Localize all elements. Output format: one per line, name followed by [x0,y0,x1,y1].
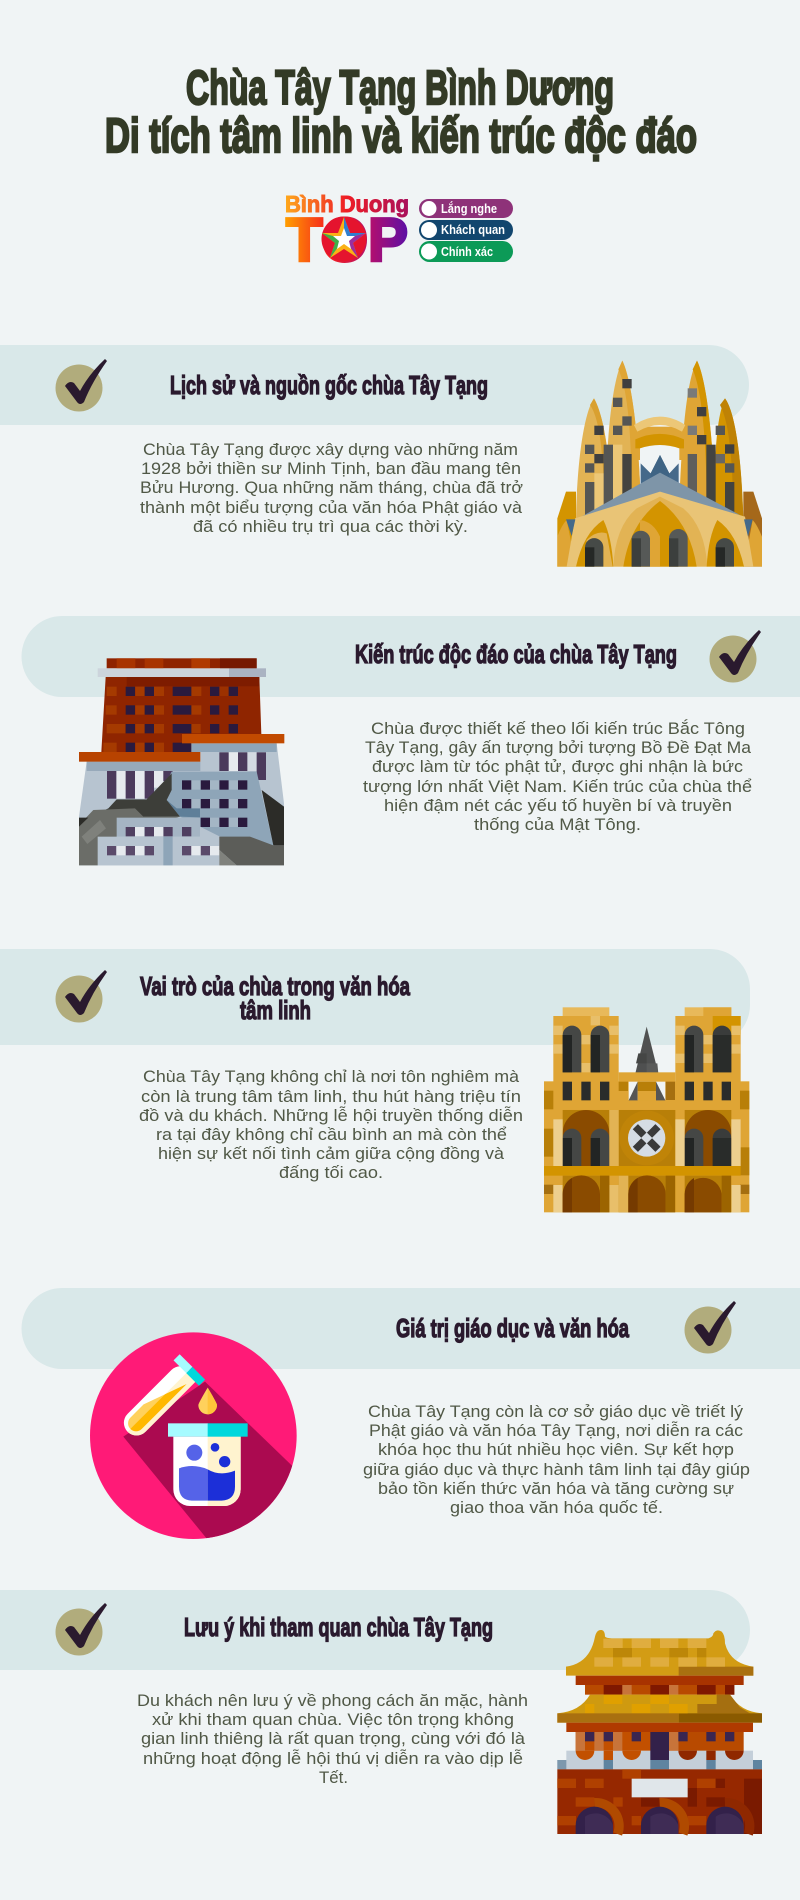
logo: Bình Dương TOP: Chính xác [441,244,493,259]
illustration: red and grey palace [79,658,284,865]
text block: xử khi tham quan chùa. Việc tôn trọng không [152,1710,514,1729]
text block: Chùa Tây Tạng không chỉ là nơi tôn nghiêm mà [143,1067,520,1086]
text block: gian linh thiêng là rất quan trọng, cùng với đó là [141,1729,526,1748]
panel: cultural role [0,949,750,1212]
panel: education [22,1288,800,1547]
text block: Tây Tạng, gây ấn tượng bởi tượng Bồ Đề Đạt Ma [365,738,752,757]
text block: thành một biểu tượng của văn hóa Phật giáo và [140,498,523,517]
text block: bảo tồn kiến thức văn hóa và tăng cường sự [378,1479,734,1498]
icon: check mark [56,1603,107,1656]
text block [140,440,523,536]
text block [363,1402,750,1517]
heading band [0,949,750,1045]
text block [139,1067,523,1182]
logo: Bình Dương TOP: Khách quan [441,222,505,237]
panel: architecture [22,616,800,865]
text block: thống của Mật Tông. [474,815,641,834]
logo: Bình Dương TOP: TOP [286,206,408,274]
text block [363,719,752,834]
illustration: imperial gate pagoda [557,1630,762,1834]
text block: 1928 bởi thiền sư Minh Tịnh, ban đầu mang tên [141,459,521,478]
text block: Chùa Tây Tạng được xây dựng vào những năm [143,440,518,459]
text block: Phật giáo và văn hóa Tây Tạng, nơi diễn ra các [369,1421,744,1440]
text block: đã có nhiều trụ trì qua các thời kỳ. [193,517,468,536]
text block [137,1691,528,1787]
text block: hiện sự kết nối tình cảm giữa cộng đồng và [158,1144,505,1163]
icon: check mark [710,630,761,682]
text block: còn là trung tâm tâm linh, thu hút hàng triệu tín [141,1087,521,1106]
text block: giao thoa văn hóa quốc tế. [450,1498,663,1517]
heading band [22,1288,800,1369]
text block: ra tại đây không chỉ cầu bình an mà còn thể [156,1125,507,1144]
text block: đồ và du khách. Những lễ hội truyền thống diễn [139,1106,523,1125]
heading band [0,1590,750,1670]
heading: Vai trò của chùa trong văn hóa [140,971,410,1001]
heading band [0,345,749,425]
text block: Chùa được thiết kế theo lối kiến trúc Bắc Tông [371,719,745,738]
heading [140,971,410,1025]
heading: Lưu ý khi tham quan chùa Tây Tạng [184,1612,493,1642]
text block: Tết. [319,1768,348,1787]
icon: check mark [56,359,107,412]
text block: hiện đậm nét các yếu tố huyền bí và truyền [384,796,732,815]
icon: check mark [56,970,107,1022]
text block: Chùa Tây Tạng còn là cơ sở giáo dục về triết lý [368,1402,744,1421]
panel: visitor notes [0,1590,762,1834]
panel: history [0,345,762,567]
text block: được làm từ tóc phật tử, được ghi nhận là bức [372,757,744,776]
text block: đấng tối cao. [279,1163,383,1182]
icon: check mark [684,1301,736,1354]
heading: tâm linh [240,995,311,1025]
heading band [22,616,800,697]
text block: tượng lớn nhất Việt Nam. Kiến trúc của chùa thể [363,777,752,796]
heading: Giá trị giáo dục và văn hóa [396,1313,629,1343]
logo: Bình Dương TOP: Bình Duong [285,191,409,217]
heading: Lịch sử và nguồn gốc chùa Tây Tạng [170,370,488,400]
illustration: cathedral with spires [557,361,762,567]
text block: khóa học thu hút nhiều học viên. Sự kết hợp [378,1440,734,1459]
text block: giữa giáo dục và thực hành tâm linh tại đây giúp [363,1460,750,1479]
logo: Bình Dương TOP: Lắng nghe [441,201,497,216]
illustration: gothic cathedral facade [544,1007,749,1212]
title [105,62,697,163]
text block: những hoạt động lễ hội thú vị diễn ra vào dịp lễ [143,1749,523,1768]
illustration: test tube and beaker [90,1332,303,1547]
text block: Du khách nên lưu ý về phong cách ăn mặc, hành [137,1691,528,1710]
text block: Bửu Hương. Qua những năm tháng, chùa đã trở [140,478,523,497]
logo: Bình Dương TOP [285,191,513,274]
